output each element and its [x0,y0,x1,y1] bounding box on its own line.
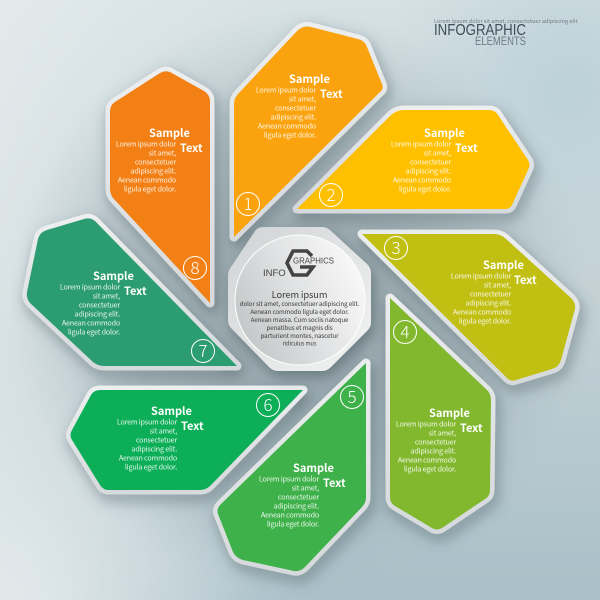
panel 3: olive: 3 [391,234,401,259]
panel 4: lime green: Text [460,420,483,436]
panel 6: green [70,390,303,490]
panel 8: orange: Lorem ipsum dolor [116,140,176,150]
panel 1: amber: adipiscing elit. [270,112,316,122]
panel 5: mid green: adipiscing elit. [273,502,319,512]
panel 6: green: Lorem ipsum dolor [117,418,177,428]
panel 6: green: consectetuer [136,436,177,446]
panel 8: orange: adipiscing elit. [130,166,176,176]
panel 3: olive: adipiscing elit. [465,298,511,308]
panel 1: amber: consectetuer [275,104,316,114]
panel 1: amber: Lorem ipsum dolor [256,86,316,96]
panel 4: lime green: ligula eget dolor. [404,464,456,474]
center badge: Aenean massa. Cum sociis natoque [251,315,349,324]
panel 7: teal: adipiscing elit. [74,310,120,320]
panel 4: lime green: consectetuer [415,438,456,448]
header: infographic elements: Lorem ipsum dolor sit amet, consectetuer adipiscing elit [434,17,578,25]
panel 7: teal: Lorem ipsum dolor [60,282,120,292]
panel 4: lime green: sit amet, [429,428,456,438]
panel 8: orange: ligula eget dolor. [124,184,176,194]
panel 8: orange: Sample [149,125,190,141]
center badge [228,227,371,371]
panel 2: yellow [297,110,530,209]
panel 3: olive: Aenean commodo [453,308,511,318]
panel 1: amber: sit amet, [289,94,316,104]
panel 7: teal: 7 [198,337,208,362]
panel 8: orange: Aenean commodo [118,176,176,186]
panel 4: lime green: Lorem ipsum dolor [396,420,456,430]
panel 5: mid green: Lorem ipsum dolor [259,474,319,484]
panel 3: olive: Text [514,272,537,288]
panel 5: mid green [217,363,366,571]
panel 4: lime green [390,298,491,530]
panel 4: lime green: 4 [400,318,410,343]
panel 8: orange: Text [180,140,203,156]
header: infographic elements: INFOGRAPHIC [434,22,526,39]
panel 3: olive: Sample [483,257,524,273]
panel 5: mid green: Aenean commodo [261,510,319,520]
center badge: penatibus et magnis dis [266,323,333,332]
panel 8: orange: consectetuer [135,158,176,168]
panel 7: teal: Aenean commodo [62,318,120,328]
panel 5: mid green: consectetuer [278,492,319,502]
panel 6: green: ligula eget dolor. [125,462,177,472]
panel 3: olive: ligula eget dolor. [459,316,511,326]
panel 1: amber [234,26,383,237]
center badge: dolor sit amet, consectetuer adipiscing elit. [240,299,360,308]
panel 1: amber: 1 [243,190,253,215]
panel 3: olive [362,234,575,381]
panel 6: green: adipiscing elit. [131,444,177,454]
header: infographic elements [434,17,578,48]
panel 8: orange: 8 [190,254,200,279]
panel 8: orange: sit amet, [149,148,176,158]
panel 2: yellow: 2 [326,181,336,206]
panel 6: green: sit amet, [150,426,177,436]
panel 1: amber: ligula eget dolor. [264,130,316,140]
center badge: Lorem ipsum [272,287,327,301]
panel 3: olive: sit amet, [484,280,511,290]
panel 2: yellow: consectetuer [410,158,451,168]
panel 6: green: Aenean commodo [119,454,177,464]
panel 4: lime green: Aenean commodo [398,456,456,466]
center badge: INFO [263,268,286,279]
panel 7: teal: Text [124,283,147,299]
panel 4: lime green: Sample [429,405,470,421]
panel 3: olive: Lorem ipsum dolor [451,272,511,282]
panel 6: green: 6 [263,391,273,416]
panel 1: amber: Sample [289,71,330,87]
panel 7: teal: Sample [93,268,134,284]
center badge: Aenean commodo ligula eget dolor. [250,307,349,316]
panel 6: green: Sample [151,403,192,419]
panel 7: teal: ligula eget dolor. [68,328,120,338]
panel 6: green: Text [181,418,204,434]
panel 5: mid green: sit amet, [292,484,319,494]
center badge: parturient montes, nascetur [261,331,339,340]
center badge: ridiculus mus [283,340,317,348]
panel 5: mid green: Text [323,475,346,491]
panel 2: yellow: sit amet, [424,148,451,158]
panel 4: lime green: adipiscing elit. [410,446,456,456]
panel 2: yellow: Text [455,140,478,156]
panel 1: amber: Aenean commodo [258,122,316,132]
panel 3: olive: consectetuer [470,290,511,300]
panel 5: mid green: Sample [293,460,334,476]
panel 7: teal [27,218,237,366]
panel 2: yellow: Lorem ipsum dolor [391,140,451,150]
panel 2: yellow: ligula eget dolor. [399,184,451,194]
panel 7: teal: sit amet, [93,292,120,302]
panel 8: orange [110,71,210,303]
header: infographic elements: ELEMENTS [475,36,526,48]
panel 5: mid green: ligula eget dolor. [267,520,319,530]
panel 1: amber: Text [320,86,343,102]
panel 5: mid green: 5 [347,383,357,408]
panel 2: yellow: Sample [424,125,465,141]
panel 2: yellow: Aenean commodo [393,176,451,186]
panel 2: yellow: adipiscing elit. [405,166,451,176]
panel 7: teal: consectetuer [79,300,120,310]
center badge: GRAPHICS [293,256,334,266]
icon: hexagon G logo [287,251,313,275]
